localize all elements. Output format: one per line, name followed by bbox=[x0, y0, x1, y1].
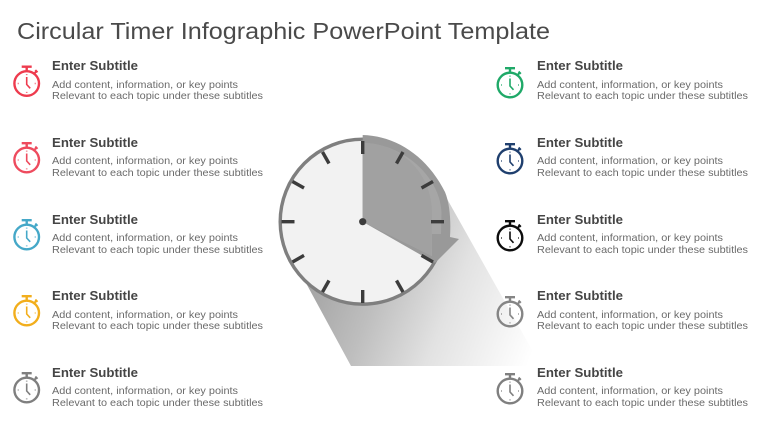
item: right 1: Add content, information, or key points bbox=[537, 80, 723, 91]
long shadow bbox=[300, 197, 541, 366]
icon: green stopwatch bbox=[498, 68, 522, 97]
item: left 2: Relevant to each topic under these subtitles bbox=[52, 168, 263, 179]
item: left 2: Enter Subtitle bbox=[52, 135, 138, 150]
elapsed time arrow wedge bbox=[363, 135, 459, 263]
item: left 1: Enter Subtitle bbox=[52, 58, 138, 73]
icon: black stopwatch bbox=[498, 221, 522, 250]
item: right 4 bbox=[498, 288, 748, 332]
item: right 3: Relevant to each topic under these subtitles bbox=[537, 245, 748, 256]
item: right 5: Add content, information, or key points bbox=[537, 386, 723, 397]
icon: navy stopwatch bbox=[498, 144, 522, 173]
tick marks bbox=[282, 141, 444, 303]
icon: grey stopwatch bbox=[14, 373, 39, 402]
item: right 4: Enter Subtitle bbox=[537, 288, 623, 303]
clock pivot bbox=[359, 218, 366, 225]
item: right 3: Enter Subtitle bbox=[537, 212, 623, 227]
item: right 4: Relevant to each topic under these subtitles bbox=[537, 321, 748, 332]
item: left 4 bbox=[14, 288, 263, 332]
item: left 1 bbox=[14, 58, 263, 102]
icon: grey stopwatch bbox=[498, 374, 522, 403]
item: left 5: Enter Subtitle bbox=[52, 365, 138, 380]
item: left 5: Relevant to each topic under these subtitles bbox=[52, 398, 263, 409]
item: right 5 bbox=[498, 365, 748, 409]
item: left 3: Enter Subtitle bbox=[52, 212, 138, 227]
item: right 2 bbox=[498, 135, 748, 179]
item: left 3 bbox=[14, 212, 263, 256]
item: left 1: Add content, information, or key points bbox=[52, 80, 238, 91]
item: right 1: Relevant to each topic under these subtitles bbox=[537, 91, 748, 102]
title: Circular Timer Infographic PowerPoint Template bbox=[17, 18, 550, 44]
icon: blue stopwatch bbox=[14, 220, 39, 249]
item: right 2: Add content, information, or key points bbox=[537, 156, 723, 167]
icon: red stopwatch bbox=[14, 67, 39, 96]
item: right 2: Relevant to each topic under these subtitles bbox=[537, 168, 748, 179]
clock bbox=[280, 135, 459, 304]
item: right 5: Relevant to each topic under these subtitles bbox=[537, 398, 748, 409]
item: left 4: Add content, information, or key points bbox=[52, 310, 238, 321]
item: left 1: Relevant to each topic under these subtitles bbox=[52, 91, 263, 102]
item: left 4: Enter Subtitle bbox=[52, 288, 138, 303]
item: right 1: Enter Subtitle bbox=[537, 58, 623, 73]
item: right 5: Enter Subtitle bbox=[537, 365, 623, 380]
item: left 2 bbox=[14, 135, 263, 179]
item: left 5: Add content, information, or key points bbox=[52, 386, 238, 397]
item: right 1 bbox=[498, 58, 748, 102]
item: left 3: Relevant to each topic under these subtitles bbox=[52, 245, 263, 256]
icon: amber stopwatch bbox=[14, 296, 39, 325]
icon: grey stopwatch bbox=[498, 297, 522, 326]
item: right 4: Add content, information, or key points bbox=[537, 310, 723, 321]
item: right 2: Enter Subtitle bbox=[537, 135, 623, 150]
item: left 3: Add content, information, or key points bbox=[52, 233, 238, 244]
icon: coral stopwatch bbox=[14, 143, 39, 172]
item: right 3: Add content, information, or key points bbox=[537, 233, 723, 244]
item: left 4: Relevant to each topic under these subtitles bbox=[52, 321, 263, 332]
item: left 5 bbox=[14, 365, 263, 409]
item: left 2: Add content, information, or key points bbox=[52, 156, 238, 167]
clock face bbox=[280, 139, 445, 304]
item: right 3 bbox=[498, 212, 748, 256]
